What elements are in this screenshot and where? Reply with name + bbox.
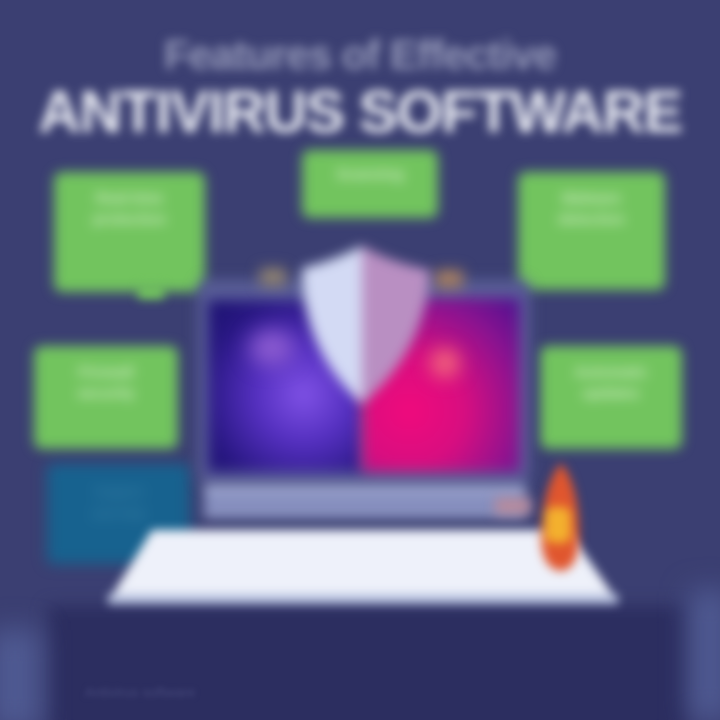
panel: middle right feature: updates bbox=[582, 385, 640, 402]
orange screen tab left bbox=[260, 268, 286, 286]
laptop base bbox=[102, 522, 624, 612]
orange screen tab right bbox=[435, 270, 463, 288]
orange glow on screen bbox=[430, 348, 460, 378]
screen left half bbox=[208, 300, 362, 472]
panel: top left feature bbox=[54, 172, 205, 292]
left desk edge glow bbox=[0, 630, 40, 720]
title line 1: Features of Effective bbox=[164, 31, 556, 78]
panel: middle right feature: Automatic bbox=[574, 364, 648, 381]
panel: middle right feature bbox=[540, 346, 682, 449]
bottom desk panel bbox=[48, 606, 688, 720]
panel: teal feature: and help bbox=[92, 505, 145, 521]
illustration: laptop bbox=[102, 239, 624, 612]
panel: middle left feature: Firewall bbox=[78, 364, 134, 381]
laptop hinge and keyboard band bbox=[204, 484, 526, 518]
panel: teal feature: Support bbox=[94, 483, 143, 499]
keyboard warm accent bbox=[495, 498, 531, 514]
connector below top left feature bbox=[138, 285, 164, 299]
panel: top right feature: Malware bbox=[562, 190, 621, 207]
panel: top right feature: detection bbox=[558, 211, 625, 228]
panel: top centre feature bbox=[302, 150, 438, 218]
panel: top centre feature: Scanning bbox=[336, 166, 404, 183]
footer text: Antivirus software bbox=[85, 684, 195, 700]
laptop screen frame bbox=[198, 280, 530, 484]
panel: top left feature: Real-time bbox=[96, 190, 163, 207]
right desk edge glow bbox=[690, 590, 720, 720]
screen right half bbox=[362, 298, 520, 472]
violet glow on screen bbox=[250, 330, 294, 366]
panel: middle left feature bbox=[34, 346, 178, 449]
icon: shield bbox=[294, 239, 436, 410]
panel: middle left feature: security bbox=[77, 385, 135, 402]
panel: top left feature: protection bbox=[93, 211, 166, 228]
panel: teal feature bbox=[47, 464, 190, 564]
title line 2: ANTIVIRUS SOFTWARE bbox=[38, 79, 682, 145]
panel: top right feature bbox=[518, 172, 665, 290]
icon: fire extinguisher bbox=[533, 459, 587, 578]
